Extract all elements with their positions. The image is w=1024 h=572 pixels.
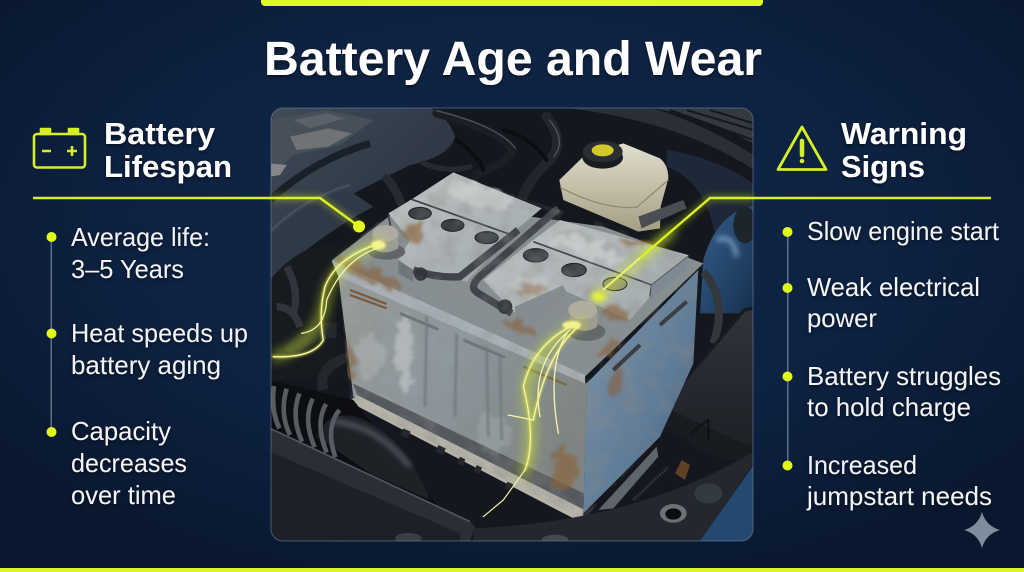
list item: heat: battery aging (71, 350, 221, 380)
grime and rust (327, 167, 707, 523)
list item: heat (71, 318, 248, 380)
heading: battery lifespan (104, 116, 232, 184)
callout line: battery lifespan (33, 198, 365, 232)
panel: battery photo illustration (270, 100, 760, 547)
reservoir (559, 141, 687, 232)
heading: battery lifespan: Battery (104, 116, 216, 151)
battery top plate (332, 200, 703, 383)
engine cover (270, 100, 455, 282)
list item: weak power (807, 272, 980, 333)
bottom accent bar (0, 568, 1024, 572)
list item: jumpstart: Increased (807, 450, 917, 480)
list item: hold charge: Battery struggles (807, 361, 1001, 391)
left engine parts (270, 246, 350, 390)
list item: capacity (71, 416, 187, 510)
list item: jumpstart (806, 450, 992, 511)
hoses (387, 111, 559, 213)
lower trim and intake hose (270, 380, 753, 545)
icon: sparkle (964, 512, 1000, 548)
list item: capacity: Capacity (71, 416, 171, 446)
list item: capacity: decreases (71, 448, 187, 478)
battery front face (338, 277, 587, 517)
top accent bar (261, 0, 763, 6)
panel: warning signs (778, 116, 1001, 511)
list item: hold charge (807, 361, 1001, 422)
list item: capacity: over time (71, 480, 176, 510)
heading: battery lifespan: Lifespan (104, 149, 232, 184)
callout line: warning signs (603, 198, 991, 290)
heading: warning signs: Warning (841, 116, 967, 151)
heading: warning signs: Signs (841, 149, 925, 184)
panel: battery lifespan (34, 116, 248, 510)
icon: warning triangle (778, 127, 826, 170)
right terminal post (568, 301, 605, 341)
left terminal post (368, 225, 405, 260)
list item: average life (71, 222, 210, 284)
heading: warning signs (841, 116, 967, 184)
electric wisps (273, 233, 670, 517)
timeline: warnings (782, 227, 792, 470)
battery side face (583, 270, 698, 513)
first lid (388, 172, 542, 282)
list item: weak power: Weak electrical (807, 272, 980, 302)
center bracket (413, 208, 558, 313)
screw caps (409, 207, 627, 291)
list item: hold charge: to hold charge (807, 392, 971, 422)
timeline: lifespan (46, 232, 56, 437)
battery base strip (349, 395, 583, 523)
icon: battery (34, 129, 85, 168)
vents (350, 290, 387, 308)
list item: jumpstart: jumpstart needs (806, 481, 992, 511)
photo border (271, 108, 753, 541)
blue strut tower (700, 205, 757, 343)
hood seal and grille (572, 108, 753, 234)
list item: heat: Heat speeds up (71, 318, 248, 348)
list item: weak power: power (807, 303, 877, 333)
list item: average life: 3–5 Years (71, 254, 184, 284)
battery (327, 167, 707, 523)
second lid (483, 220, 688, 327)
title: Battery Age and Wear (264, 33, 762, 86)
list item: slow start: Slow engine start (807, 216, 1000, 246)
fuse box (672, 306, 753, 446)
list item: average life: Average life: (71, 222, 210, 252)
